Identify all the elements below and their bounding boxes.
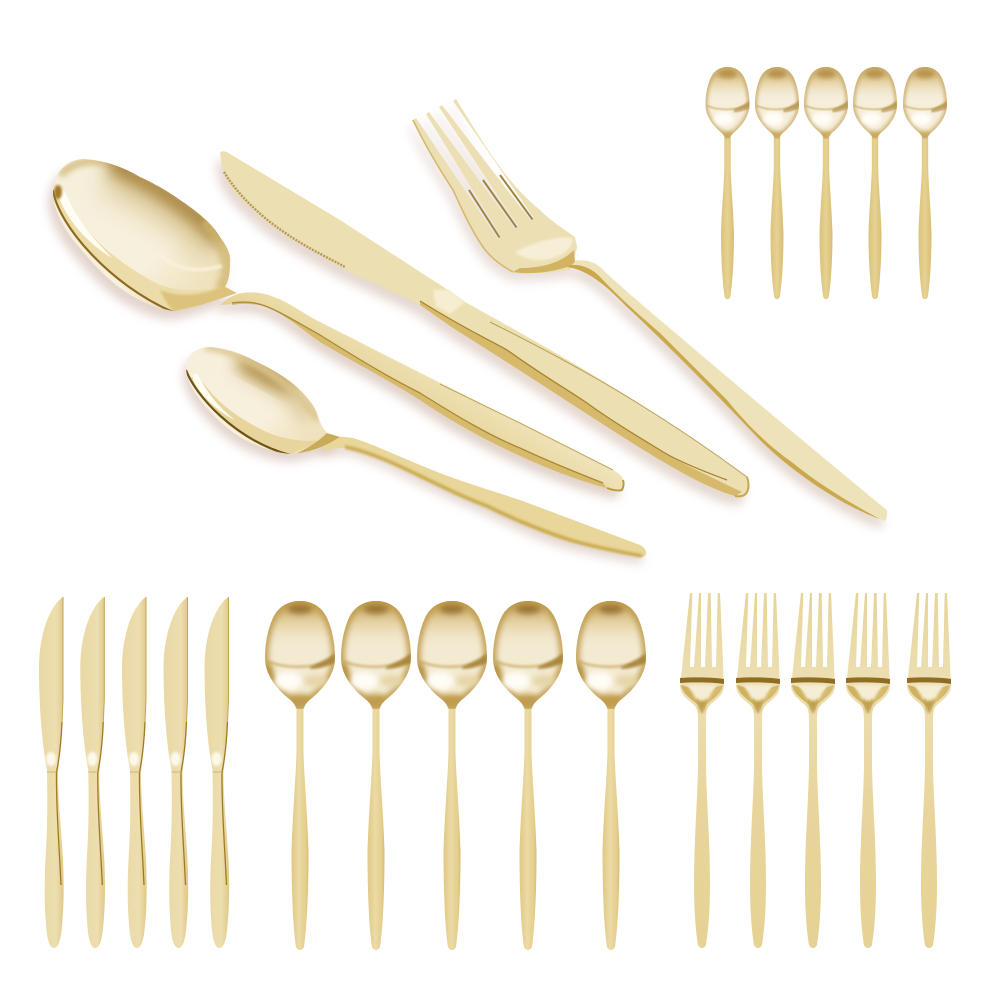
large serving spoon: [48, 159, 624, 498]
row: five small teaspoons: [705, 67, 948, 299]
row: five knives: [39, 597, 229, 948]
row: five spoons: [263, 601, 647, 950]
row: five forks: [680, 593, 951, 948]
small teaspoon: [183, 347, 646, 564]
large dinner knife: [216, 151, 748, 505]
large dinner fork: [408, 99, 887, 529]
